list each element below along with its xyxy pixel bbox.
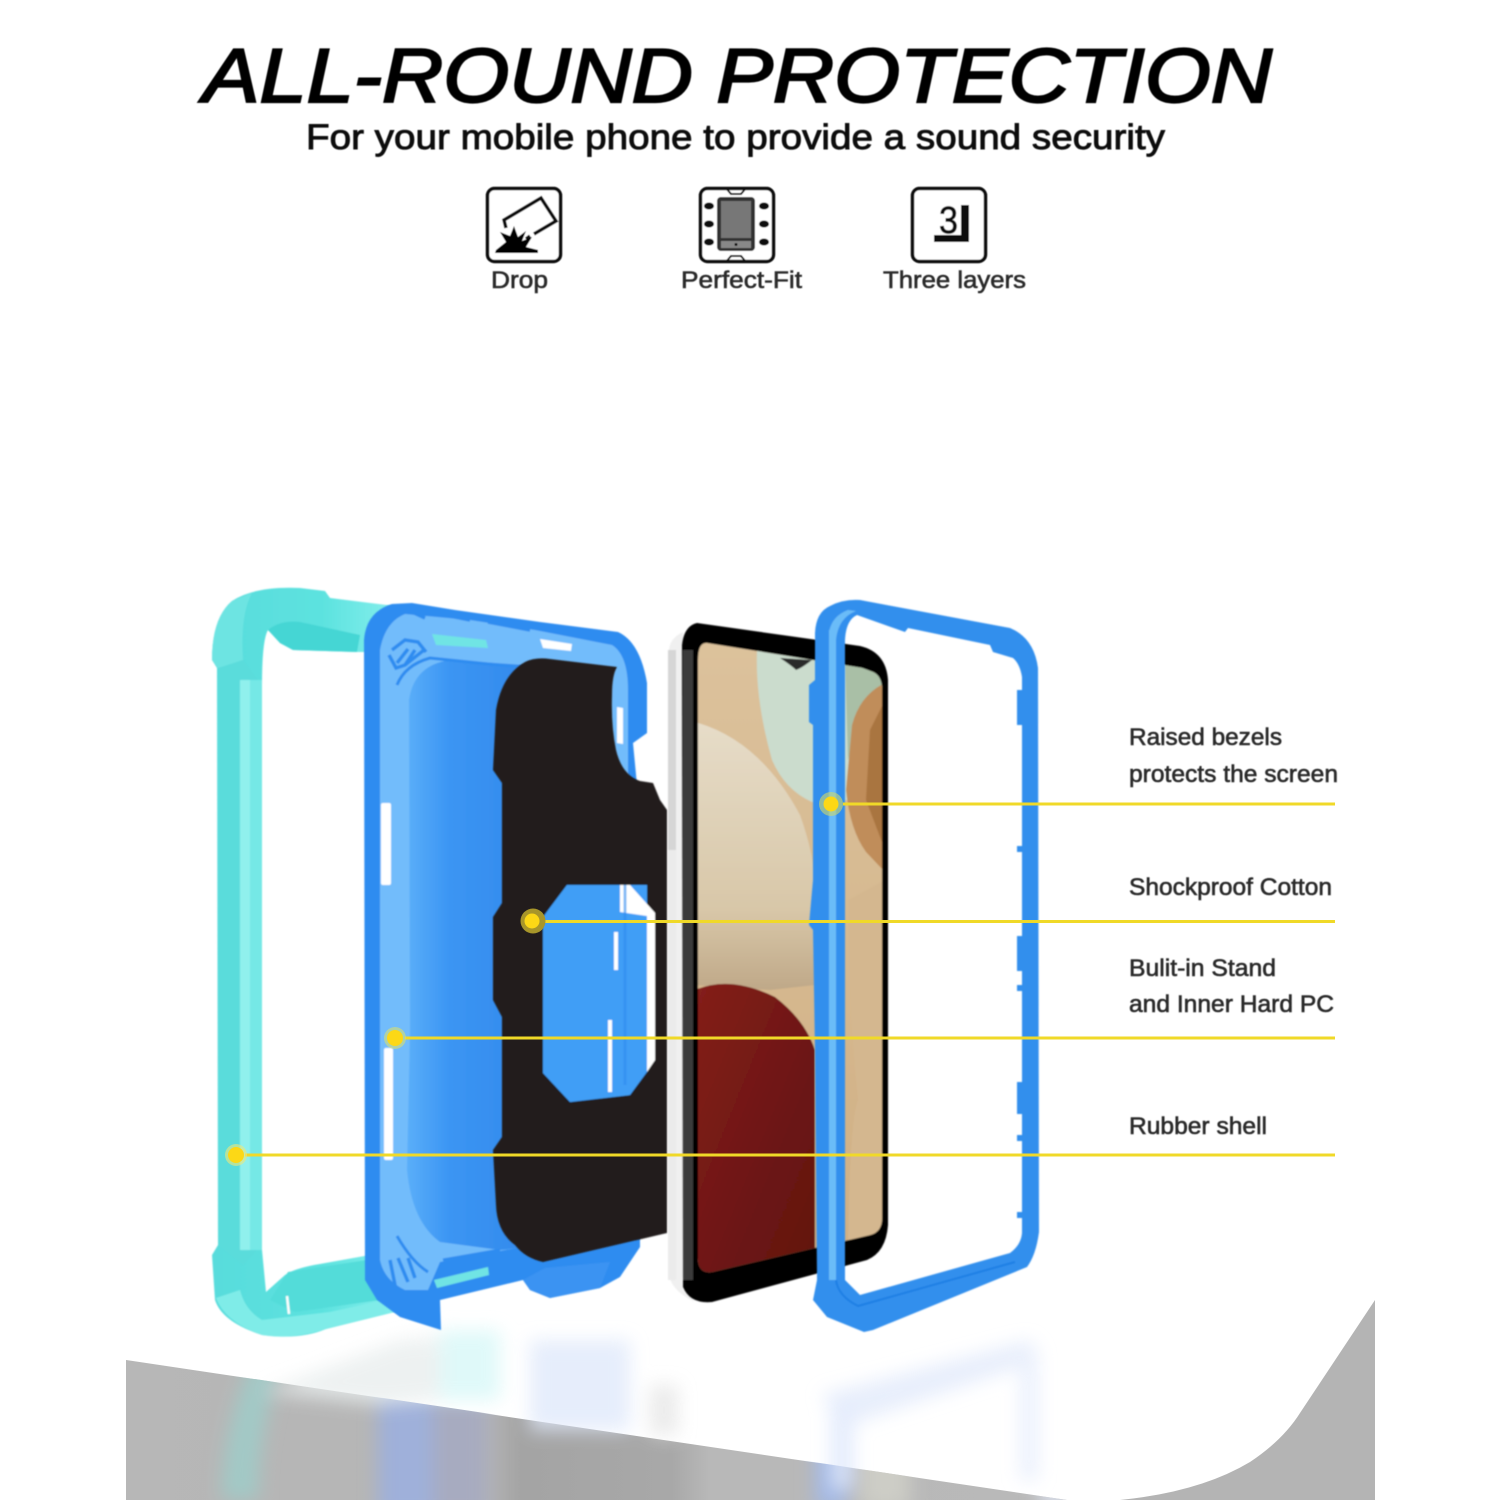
rim: light blue inner border (380, 614, 628, 1290)
icon: three layers: 3 (939, 200, 958, 242)
callout text: shockproof cotton: Shockproof Cotton (1129, 874, 1332, 901)
clips: bottom tabs (523, 1262, 610, 1298)
callout text: built-in stand: and Inner Hard PC (1129, 991, 1334, 1018)
shockproof cotton: black foam (493, 658, 667, 1262)
title: ALL-ROUND PROTECTION (199, 34, 1272, 119)
callout text: raised bezels: protects the screen (1129, 761, 1338, 788)
wallpaper (690, 630, 890, 1280)
phone: white back edge (668, 632, 695, 1302)
inner hard PC: blue case (364, 603, 647, 1330)
icon: perfect-fit (700, 188, 774, 262)
foam cutout: blue interior (543, 885, 647, 1102)
label: three layers: Three layers (883, 267, 1026, 294)
callout text: rubber shell: Rubber shell (1129, 1113, 1267, 1140)
subtitle: For your mobile phone to provide a sound security (306, 118, 1166, 157)
icon: three layers (912, 188, 986, 262)
icon: drop (488, 188, 560, 262)
phone: black body and screen (682, 623, 890, 1302)
product reflection on white surface (262, 1330, 1040, 1490)
callout text: raised bezels: Raised bezels (1129, 724, 1282, 751)
floor panel: grey surface (126, 1300, 1375, 1500)
callout text: built-in stand: Bulit-in Stand (1129, 955, 1276, 982)
raised bezels: blue front frame (809, 600, 1039, 1332)
label: drop: Drop (491, 267, 548, 294)
cavity: recessed blue tray (407, 660, 600, 1250)
callout lines: yellow leaders (245, 802, 1335, 1156)
slots: white side openings (381, 707, 623, 1160)
notch (780, 658, 812, 670)
rubber shell: teal frame (212, 588, 395, 1337)
vents: corner ribs (389, 640, 426, 1290)
rim edge lines (397, 612, 610, 1272)
label: perfect-fit: Perfect-Fit (681, 267, 802, 294)
callout dots (225, 792, 843, 1166)
